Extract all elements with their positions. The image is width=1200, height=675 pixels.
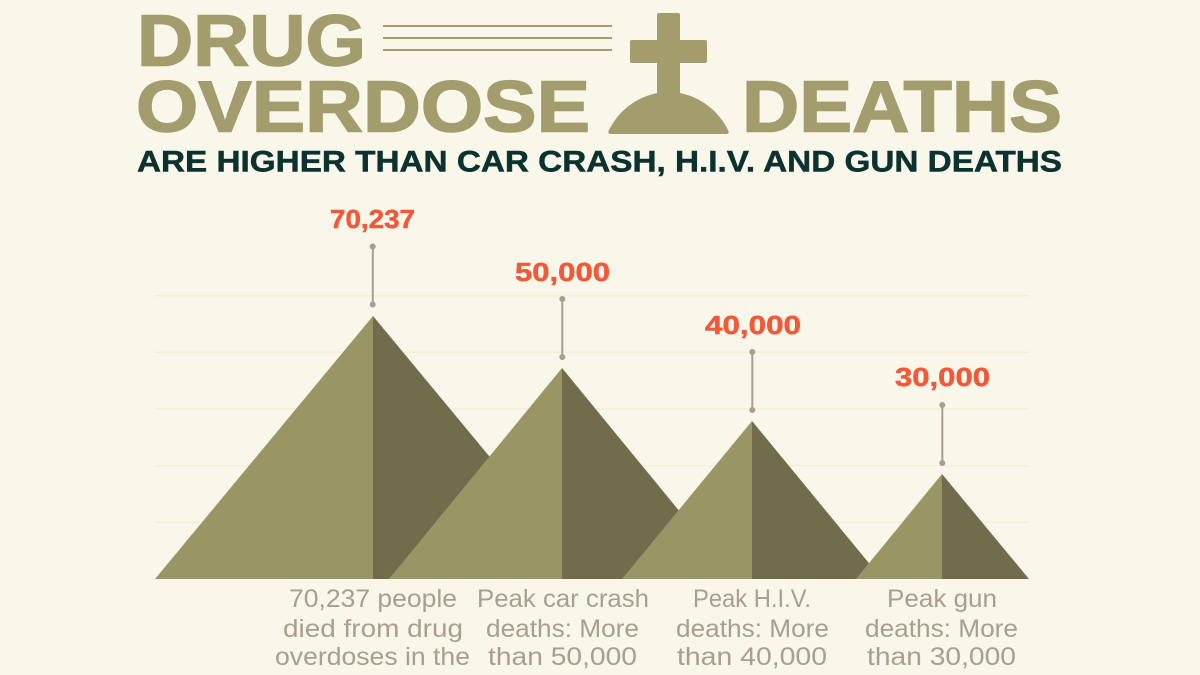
- caption: H.I.V.: Peak H.I.V.: [693, 585, 811, 613]
- caption: car crashes: Peak car crash: [477, 585, 649, 613]
- caption: car crashes: than 50,000: [488, 643, 637, 671]
- caption: drug overdoses: overdoses in the: [275, 643, 470, 671]
- caption: H.I.V.: than 40,000: [677, 643, 827, 671]
- title: DRUG: [137, 2, 366, 82]
- pyramid: drug overdoses: [155, 316, 591, 579]
- caption: H.I.V.: [676, 585, 829, 671]
- title: OVERDOSE: [136, 68, 590, 148]
- subtitle: ARE HIGHER THAN CAR CRASH, H.I.V. AND GUN DEATHS: [137, 146, 1062, 178]
- pyramid: car crashes: [389, 368, 735, 579]
- pyramid: H.I.V.: [622, 421, 882, 579]
- icon: grave cross: [608, 13, 729, 134]
- caption: guns: than 30,000: [867, 643, 1016, 671]
- caption: H.I.V.: deaths: More: [676, 615, 829, 643]
- title: DEATHS: [742, 68, 1062, 148]
- callout: 30,000: 30,000: [895, 364, 990, 392]
- caption: drug overdoses: [275, 585, 470, 671]
- callout: 40,000: 40,000: [705, 312, 801, 340]
- callout: 40,000: [705, 312, 801, 413]
- callout: 70,237: 70,237: [330, 206, 415, 234]
- caption: guns: Peak gun: [887, 585, 997, 613]
- caption: guns: [865, 585, 1018, 671]
- caption: car crashes: [477, 585, 649, 671]
- caption: car crashes: deaths: More: [486, 615, 639, 643]
- caption: drug overdoses: died from drug: [283, 615, 463, 643]
- pyramid chart: [155, 316, 1029, 579]
- title: [136, 2, 1062, 148]
- callout: 70,237: [330, 206, 415, 308]
- caption: guns: deaths: More: [865, 615, 1018, 643]
- callout: 50,000: 50,000: [515, 259, 610, 287]
- callout: 50,000: [515, 259, 610, 360]
- caption: drug overdoses: 70,237 people: [289, 585, 457, 613]
- pyramid: guns: [856, 474, 1029, 579]
- callout: 30,000: [895, 364, 990, 466]
